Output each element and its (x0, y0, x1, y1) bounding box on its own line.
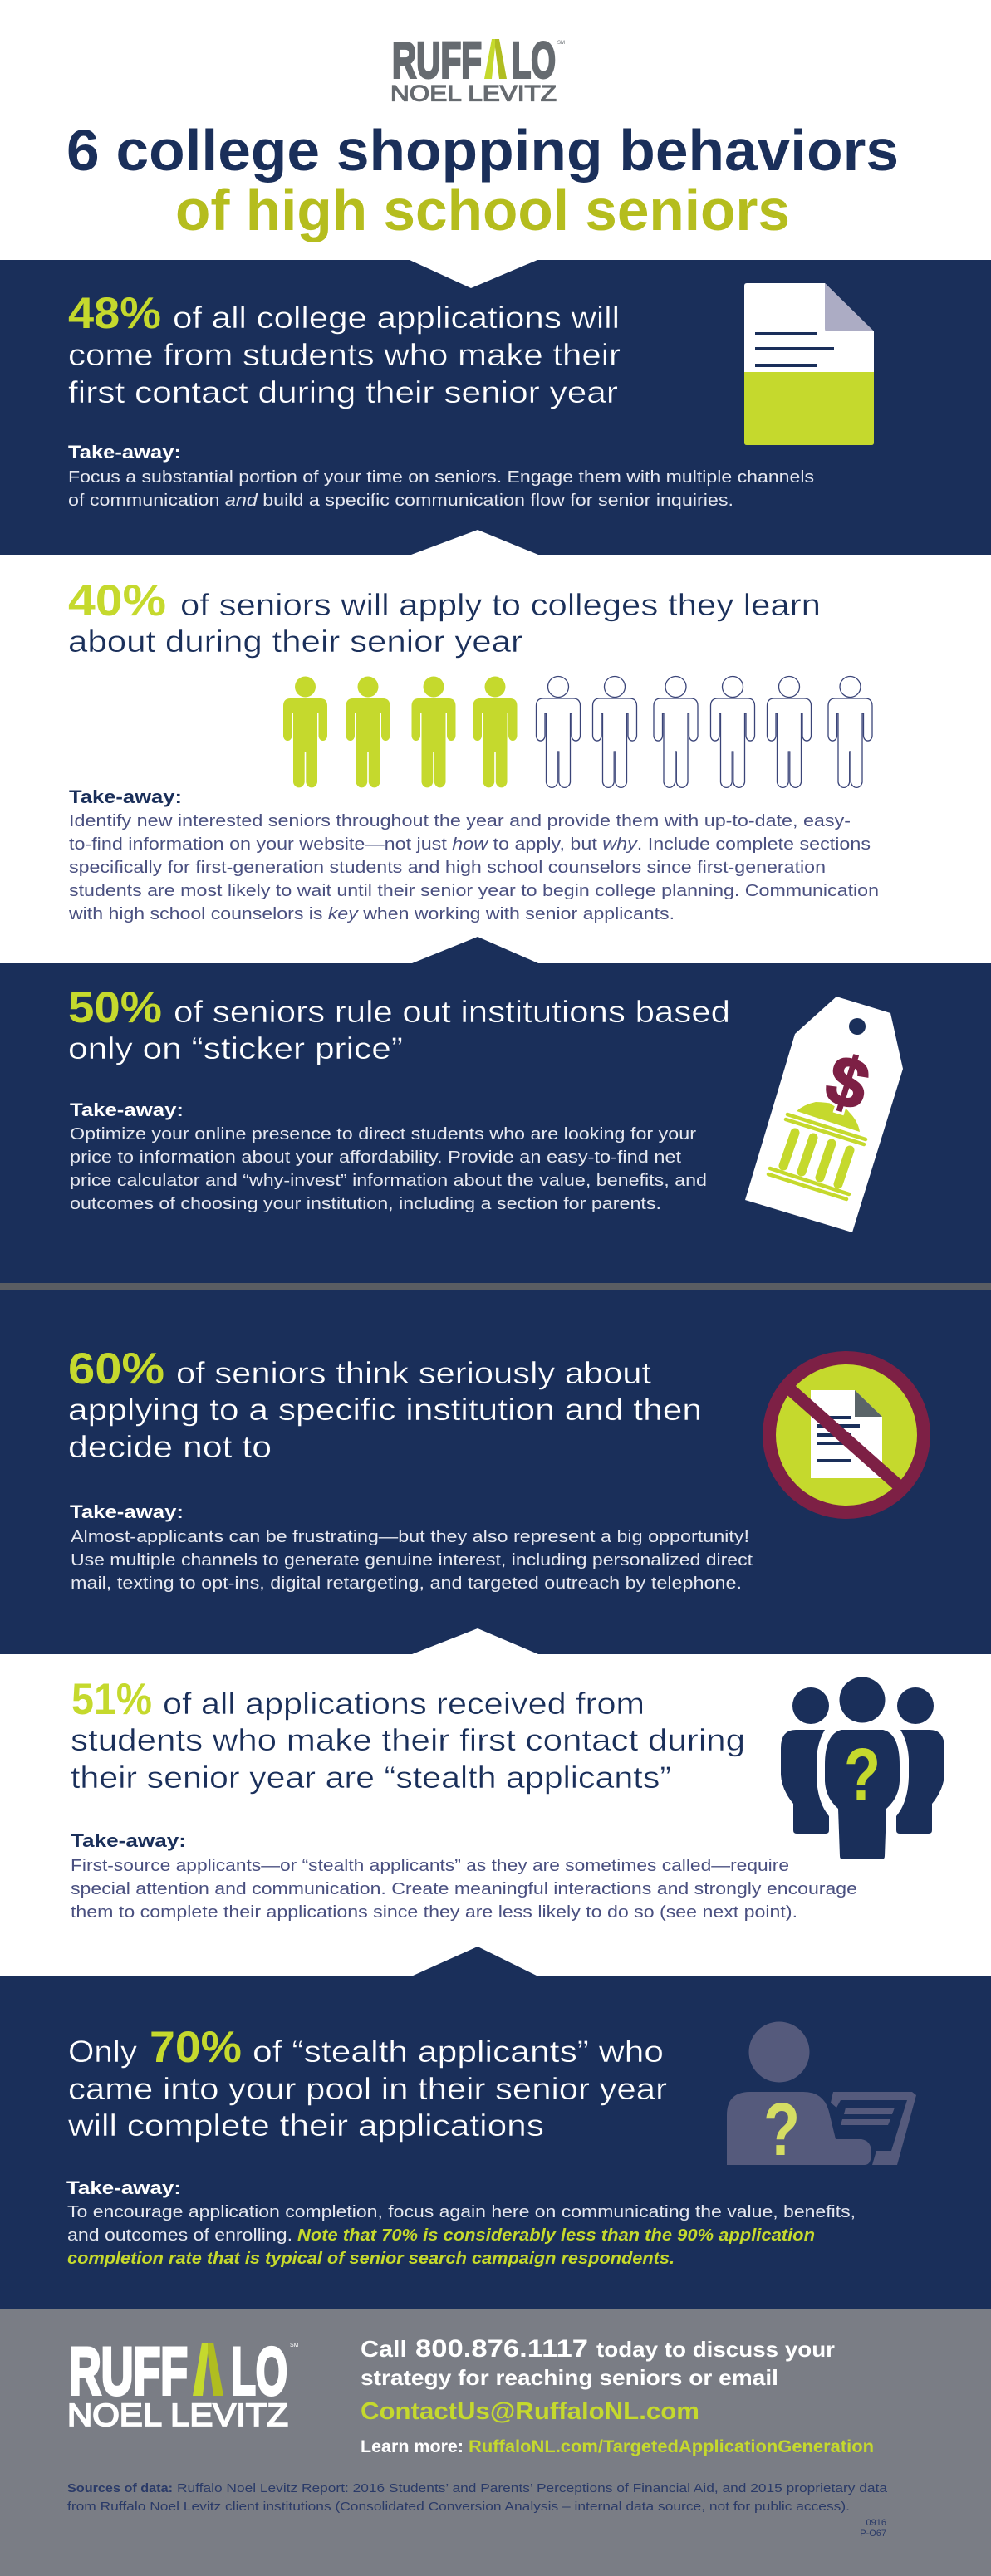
sources of data (67, 2481, 888, 2539)
heading: 50%: 50% (68, 983, 162, 1032)
heading: 51%: 51% (71, 1675, 152, 1724)
take-away text (66, 2177, 856, 2268)
logo: Ruffalo Noel Levitz: LO (512, 32, 556, 88)
divider band (0, 1283, 991, 1290)
call to action: Call (361, 2336, 407, 2362)
take-away text: of communication and build a specific communication flow for senior inquiries. (68, 492, 733, 510)
heading: 51%: of all applications received from (163, 1687, 645, 1721)
take-away text: with high school counselors is key when working with senior applicants. (68, 905, 675, 923)
take-away text: Take-away: (68, 442, 181, 463)
heading: 60% (68, 1344, 702, 1464)
heading: 48%: come from students who make their (68, 338, 621, 372)
call to action: Learn more: (361, 2437, 464, 2456)
heading: 50% (68, 983, 730, 1065)
logo: Ruffalo Noel Levitz (390, 32, 565, 106)
take-away text (70, 1099, 707, 1213)
icon: person at laptop with question mark (727, 2021, 916, 2172)
panel: 51% stealth applicants (71, 1675, 944, 1922)
take-away text (68, 442, 814, 510)
icon: application document (744, 283, 874, 445)
heading: 51%: their senior year are “stealth applicants” (71, 1761, 671, 1795)
panel: 48% first contact (0, 260, 991, 555)
take-away text: First-source applicants—or “stealth applicants” as they are sometimes called—require (71, 1857, 789, 1875)
icon: price tag with campus building (745, 997, 903, 1232)
heading: 70%: came into your pool in their senior year (68, 2072, 667, 2106)
sources of data: Ruffalo Noel Levitz Report: 2016 Students’ and Parents’ Perceptions of Financial Aid, and 2015 proprietary data (177, 2481, 888, 2495)
take-away text: Take-away: (69, 786, 182, 807)
title: 6 college shopping behaviors (66, 118, 899, 183)
take-away text: specifically for first-generation students and high school counselors since first-generation (69, 859, 826, 877)
heading: 50%: of seniors rule out institutions based (174, 995, 730, 1029)
take-away text: Use multiple channels to generate genuine interest, including personalized direct (71, 1551, 753, 1570)
take-away text: Identify new interested seniors throughout the year and provide them with up-to-date, easy- (69, 812, 851, 830)
panel: 60% decide not to (0, 1290, 991, 1654)
logo: Ruffalo Noel Levitz: SM (557, 41, 565, 46)
heading: 48%: first contact during their senior year (68, 375, 618, 409)
heading: 51% (71, 1675, 745, 1795)
call to action: ContactUs@RuffaloNL.com (361, 2398, 699, 2425)
logo: Ruffalo Noel Levitz white: SM (290, 2343, 299, 2348)
heading: 40%: about during their senior year (68, 624, 522, 659)
logo: Ruffalo Noel Levitz white: RUFF (69, 2334, 188, 2409)
sources of data: 0916 (866, 2518, 886, 2528)
panel: 70% complete applications (0, 1947, 991, 2309)
take-away text: them to complete their applications since they are less likely to do so (see next point). (71, 1903, 797, 1922)
take-away text: price calculator and “why-invest” information about the value, benefits, and (70, 1172, 707, 1190)
icon: three people with question mark (781, 1677, 944, 1859)
take-away text: students are most likely to wait until their senior year to begin college planning. Communication (69, 882, 879, 900)
take-away text: Almost-applicants can be frustrating—but they also represent a big opportunity! (71, 1528, 749, 1546)
heading: 70%: of “stealth applicants” who (253, 2035, 664, 2069)
sources of data: from Ruffalo Noel Levitz client institutions (Consolidated Conversion Analysis – internal data source, not for public access). (67, 2500, 850, 2514)
logo: Ruffalo Noel Levitz: NOEL LEVITZ (390, 81, 557, 106)
heading: 48%: 48% (68, 289, 161, 338)
logo: Ruffalo Noel Levitz white: LO (231, 2334, 287, 2409)
take-away text: and outcomes of enrolling. (67, 2226, 292, 2245)
panel: 50% sticker price (0, 937, 991, 1283)
take-away text (71, 1830, 857, 1922)
heading: 40% (68, 576, 821, 659)
call to action: 800.876.1117 (415, 2335, 588, 2363)
panel: 40% learn about colleges (68, 576, 879, 923)
heading: 50%: only on “sticker price” (68, 1031, 403, 1065)
heading: 40%: 40% (68, 576, 166, 625)
heading: 40%: of seniors will apply to colleges they learn (180, 588, 821, 622)
icon: prohibited document (769, 1358, 924, 1512)
take-away text (70, 1501, 753, 1593)
take-away text: Take-away: (71, 1830, 186, 1851)
heading: 48% (68, 289, 621, 409)
take-away text: To encourage application completion, focus again here on communicating the value, benefits, (67, 2203, 856, 2221)
pictogram: 4 of 10 people filled (283, 676, 872, 787)
icon: price tag with campus building: $ (817, 1039, 878, 1125)
icon: three people with question mark: ? (844, 1734, 881, 1817)
take-away text: special attention and communication. Create meaningful interactions and strongly encourage (71, 1880, 857, 1898)
heading: 51%: students who make their first contact during (71, 1723, 745, 1757)
heading: 70%: 70% (150, 2023, 242, 2072)
heading: 60%: decide not to (68, 1430, 272, 1464)
heading: 60%: applying to a specific institution and then (68, 1393, 702, 1427)
heading: 60%: 60% (68, 1344, 164, 1393)
take-away text: Note that 70% is considerably less than the 90% application (297, 2226, 815, 2245)
logo: Ruffalo Noel Levitz white: NOEL LEVITZ (67, 2398, 288, 2433)
heading: 60%: of seniors think seriously about (176, 1356, 652, 1390)
take-away text: mail, texting to opt-ins, digital retargeting, and targeted outreach by telephone. (71, 1574, 742, 1593)
take-away text: Take-away: (70, 1099, 184, 1120)
panel: footer (0, 2309, 991, 2576)
icon: price tag with campus building: $ (817, 1039, 878, 1125)
take-away text: Take-away: (70, 1501, 184, 1522)
call to action: RuffaloNL.com/TargetedApplicationGeneration (469, 2437, 874, 2456)
title (66, 118, 899, 242)
heading: 70% (67, 2023, 667, 2143)
take-away text (68, 786, 879, 923)
take-away text: outcomes of choosing your institution, including a section for parents. (70, 1195, 661, 1213)
heading: 70%: Only (68, 2035, 138, 2069)
sources of data: Sources of data: (67, 2481, 173, 2495)
title: of high school seniors (175, 178, 790, 242)
take-away text: to-find information on your website—not just how to apply, but why . Include complete sections (69, 835, 871, 854)
sources of data: P-O67 (860, 2529, 886, 2539)
take-away text: Optimize your online presence to direct students who are looking for your (70, 1125, 696, 1144)
icon: person at laptop with question mark: ? (763, 2089, 800, 2172)
take-away text: price to information about your affordability. Provide an easy-to-find net (70, 1148, 682, 1167)
logo: Ruffalo Noel Levitz: RUFF (392, 32, 482, 88)
take-away text: Take-away: (66, 2177, 181, 2198)
call to action: today to discuss your (596, 2337, 835, 2362)
call to action: strategy for reaching seniors or email (361, 2365, 778, 2390)
logo: Ruffalo Noel Levitz white (67, 2334, 299, 2433)
heading: 48%: of all college applications will (173, 301, 620, 335)
take-away text: Focus a substantial portion of your time on seniors. Engage them with multiple channels (68, 468, 814, 487)
heading: 70%: will complete their applications (67, 2108, 544, 2143)
call to action (361, 2335, 874, 2456)
take-away text: completion rate that is typical of senior search campaign respondents. (67, 2250, 675, 2268)
